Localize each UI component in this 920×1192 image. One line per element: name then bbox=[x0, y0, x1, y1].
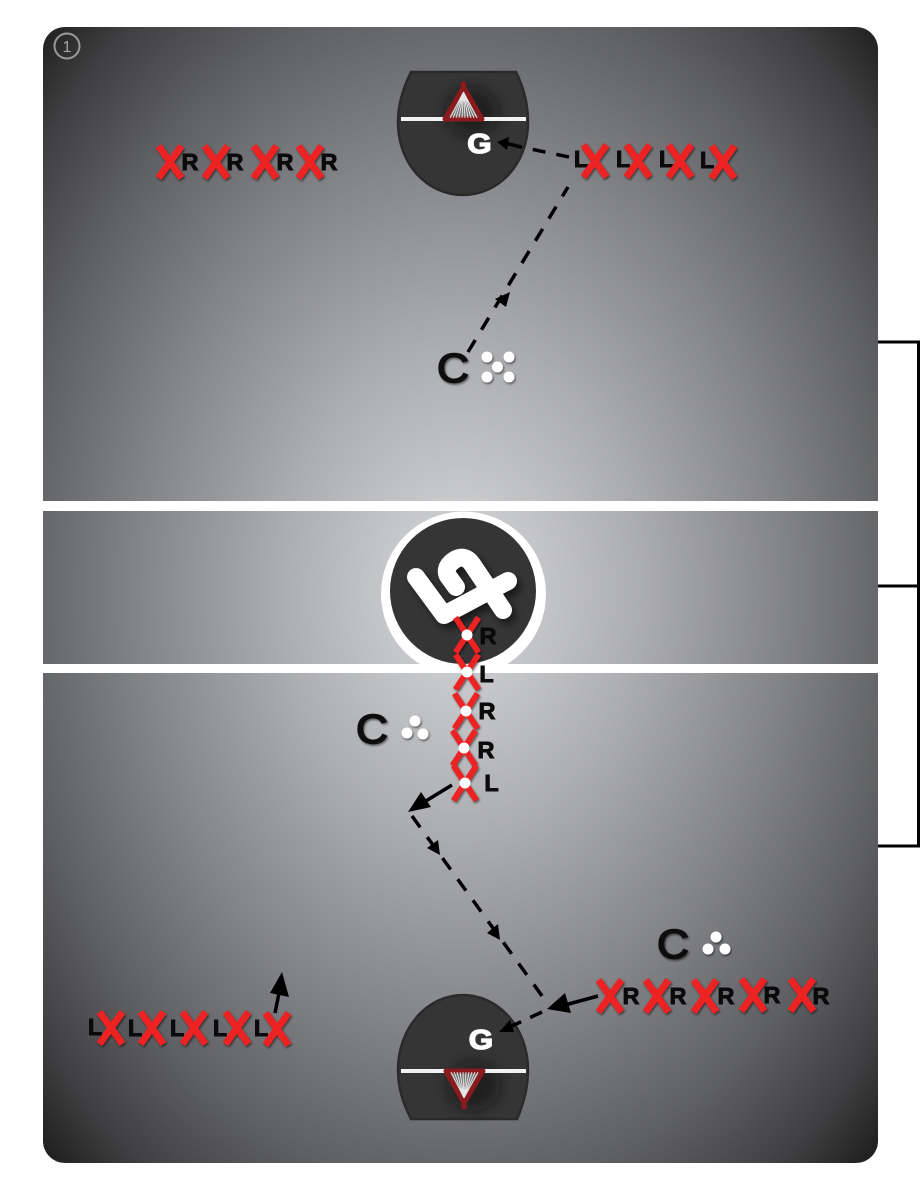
arrow: line player breaks out bbox=[408, 785, 452, 812]
line of players at midfield bbox=[452, 618, 499, 800]
attackers bottom left with L labels: L bbox=[128, 1015, 142, 1041]
attackers bottom left with L labels bbox=[88, 1012, 288, 1045]
midfield line lower bbox=[43, 664, 878, 673]
arrow: attacker shot to top goal bbox=[497, 137, 569, 157]
top goal crease bbox=[398, 72, 528, 195]
attackers bottom left with L labels: L bbox=[254, 1015, 268, 1041]
coach with balls middle bbox=[356, 706, 428, 753]
center circle logo bbox=[381, 512, 546, 664]
coach with balls middle: C bbox=[356, 706, 388, 753]
bottom goal crease bbox=[398, 995, 528, 1119]
defenders top left with R labels: R bbox=[182, 149, 199, 175]
line of players at midfield: R bbox=[480, 623, 497, 649]
defenders top left with R labels: R bbox=[277, 149, 294, 175]
coach with balls top: C bbox=[437, 345, 469, 392]
attackers bottom right with R labels: R bbox=[813, 983, 830, 1009]
defenders top left with R labels bbox=[158, 146, 338, 178]
attackers bottom left with L labels: L bbox=[213, 1015, 227, 1041]
attackers bottom right with R labels: R bbox=[764, 982, 781, 1008]
coach with balls bottom right bbox=[657, 921, 730, 968]
line of players at midfield: R bbox=[478, 737, 495, 763]
defenders top left with R labels: R bbox=[321, 149, 338, 175]
coach with balls bottom right: C bbox=[657, 921, 689, 968]
attackers bottom left with L labels: L bbox=[88, 1014, 102, 1040]
step number badge: 1 bbox=[63, 39, 72, 56]
attackers top right with L labels: L bbox=[659, 146, 673, 172]
line of players at midfield: R bbox=[479, 698, 496, 724]
arrow: shot to bottom goal bbox=[499, 1012, 542, 1032]
bracket on right side bbox=[878, 342, 918, 846]
goalie label top: G bbox=[467, 129, 492, 160]
defenders top left with R labels: R bbox=[227, 149, 244, 175]
attackers bottom right with R labels: R bbox=[718, 983, 735, 1009]
line of players at midfield: L bbox=[484, 770, 499, 796]
icon: top goal net bbox=[445, 82, 482, 119]
step number badge bbox=[54, 34, 80, 58]
icon: bottom goal net bbox=[446, 1071, 483, 1110]
line of players at midfield: L bbox=[479, 661, 494, 687]
coach with balls top bbox=[437, 345, 514, 392]
attackers top right with L labels: L bbox=[616, 146, 630, 172]
attackers bottom right with R labels: R bbox=[623, 983, 640, 1009]
attackers top right with L labels: L bbox=[574, 146, 588, 172]
logo mark bbox=[416, 558, 508, 615]
midfield line upper bbox=[43, 501, 878, 511]
attackers top right with L labels: L bbox=[700, 147, 714, 173]
attackers bottom right with R labels: R bbox=[670, 983, 687, 1009]
attackers bottom right with R labels bbox=[598, 979, 830, 1012]
attackers bottom left with L labels: L bbox=[170, 1015, 184, 1041]
arrow: coach pass to top attacker bbox=[468, 187, 568, 352]
arrow: bottom left attacker moves up bbox=[270, 972, 289, 1013]
attackers top right with L labels bbox=[574, 145, 734, 178]
arrow: pass from right attacker bbox=[547, 993, 598, 1013]
goalie label bottom: G bbox=[469, 1025, 493, 1056]
arrow: cut toward goal bbox=[412, 816, 545, 1000]
